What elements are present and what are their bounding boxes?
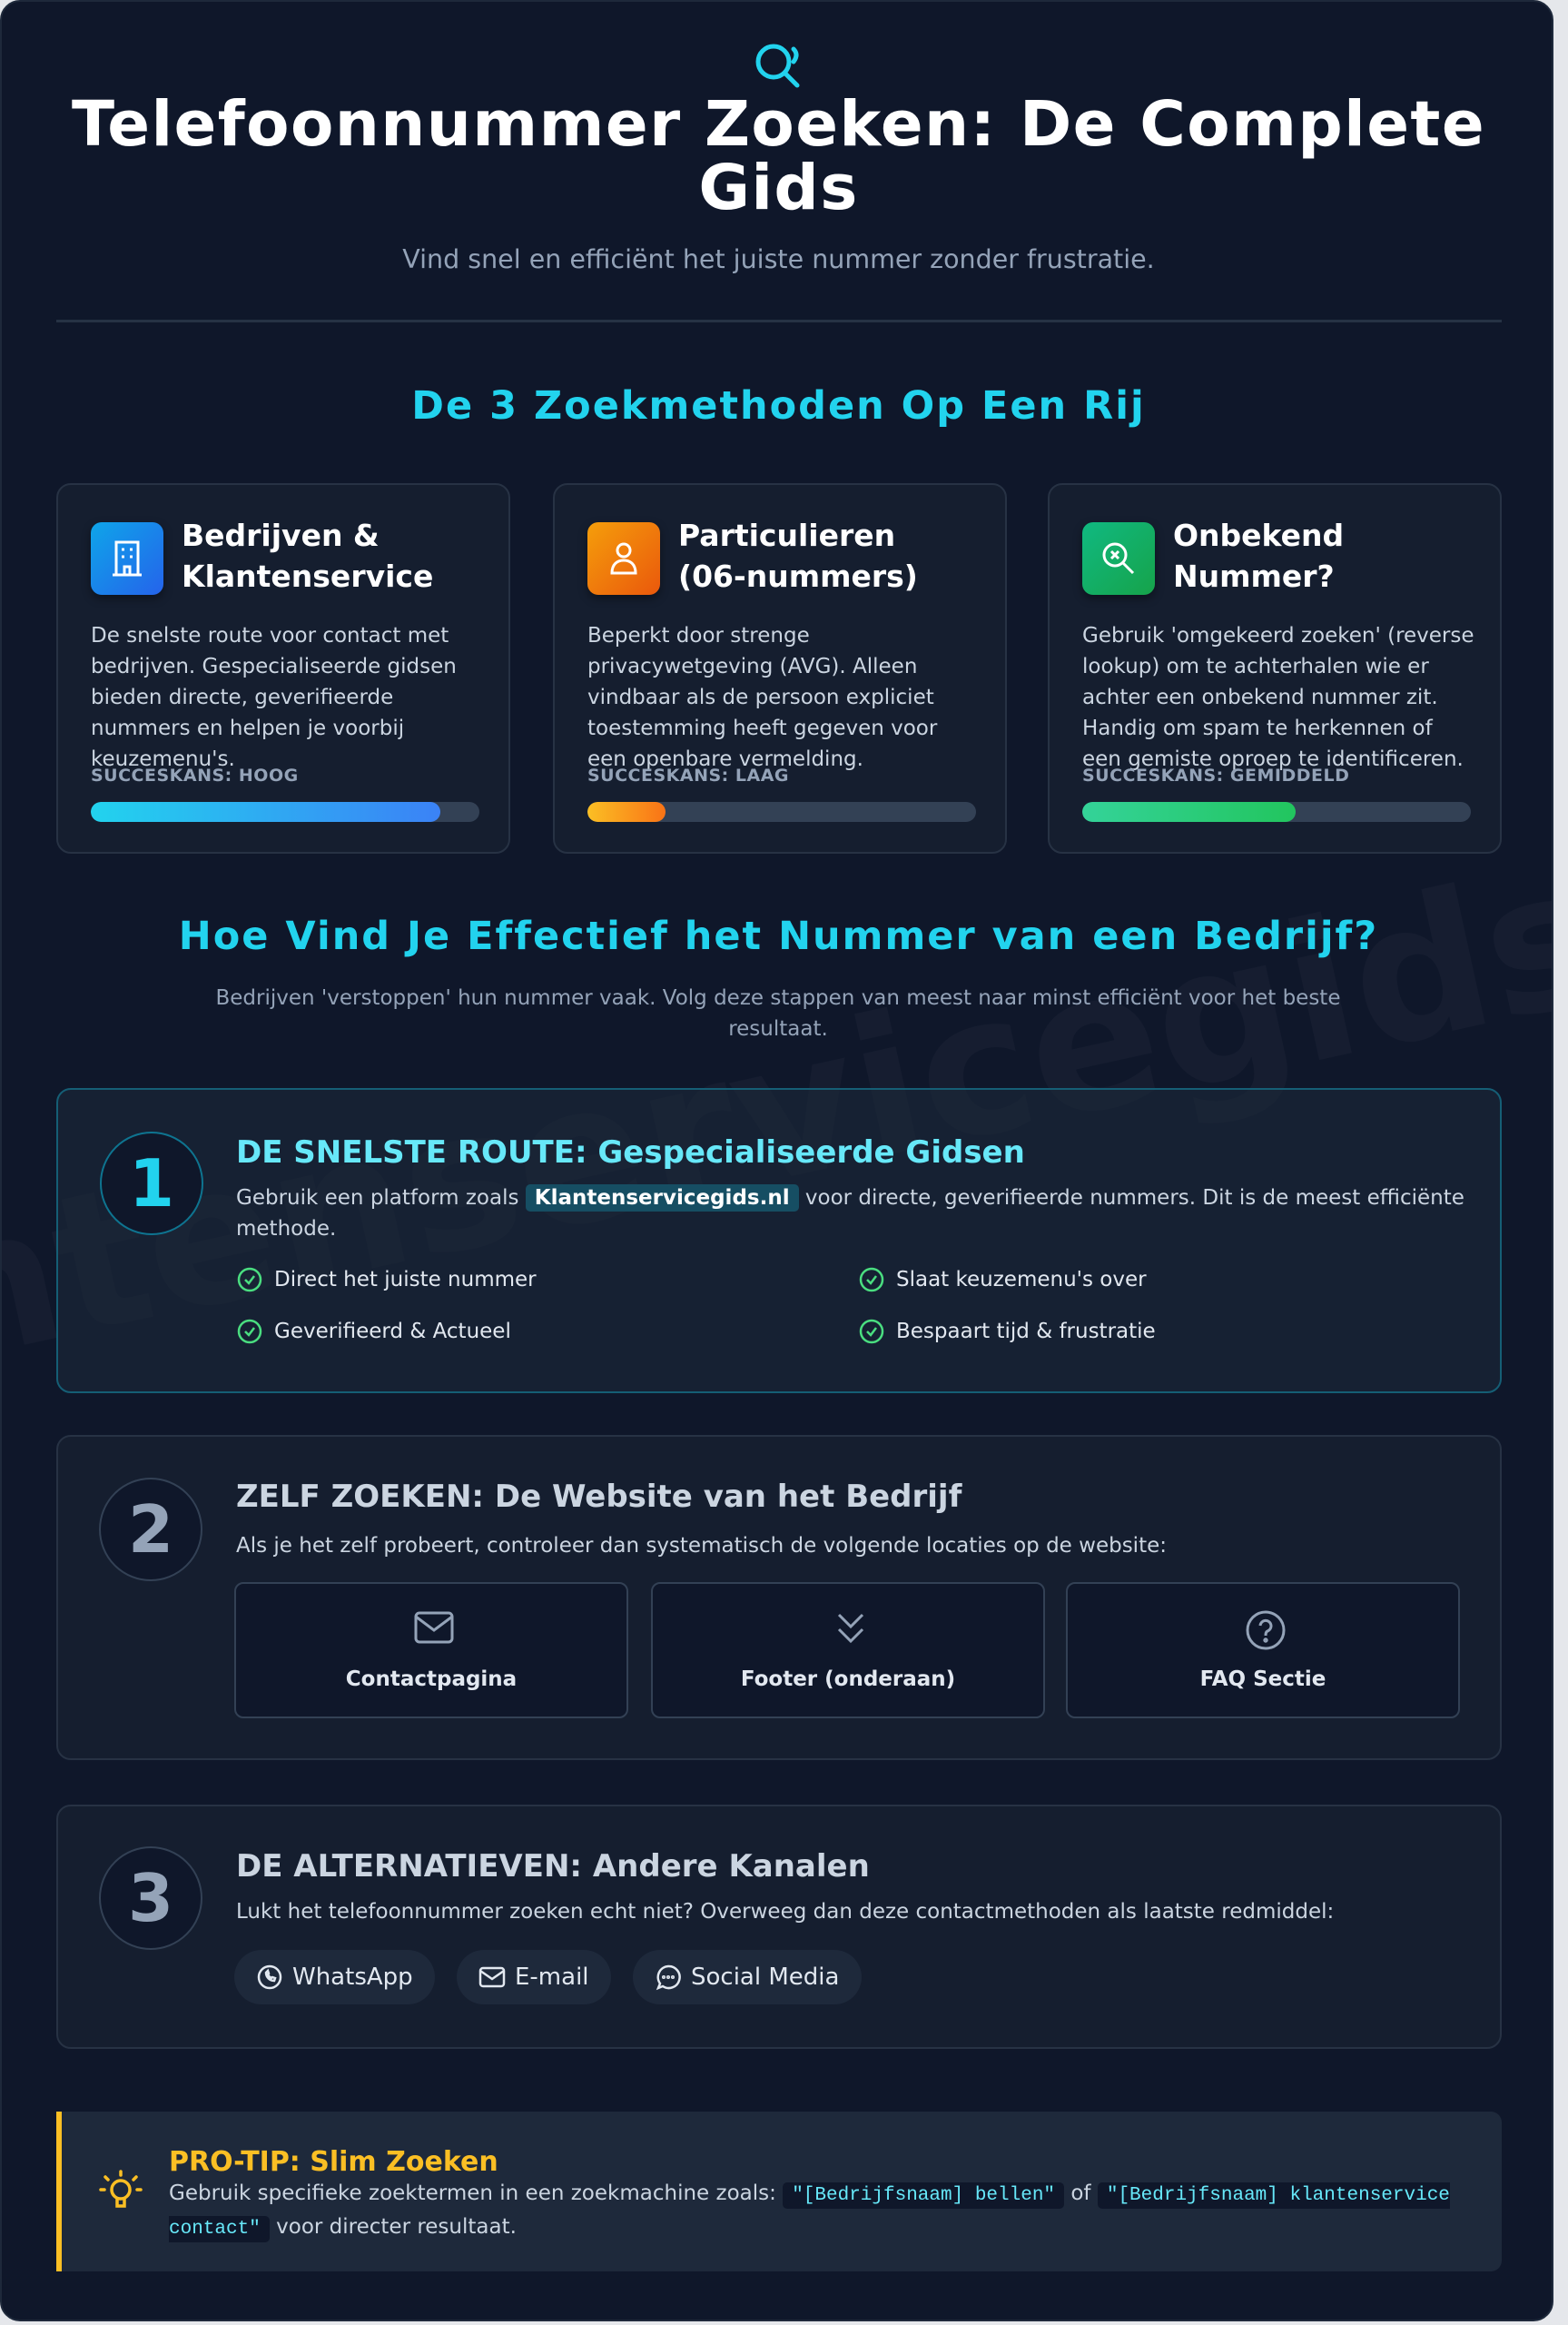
icon: building (91, 522, 163, 595)
box: faq (1066, 1582, 1460, 1718)
panel: onbekend: Gebruik 'omgekeerd zoeken' (reverse lookup) om te achterhalen wie er achter een onbekend nummer zit. Handig om spam te herkennen of een gemiste oproep te identificeren. (1082, 624, 1474, 771)
box: footer: Footer (onderaan) (741, 1667, 955, 1691)
panel: bedrijven: Klantenservice (182, 559, 433, 594)
number 2 (99, 1478, 202, 1581)
panel: particulieren: Particulieren (678, 518, 895, 553)
number 2: 2 (128, 1491, 173, 1568)
box: faq: FAQ Sectie (1200, 1667, 1326, 1691)
panel: step 1: Gebruik een platform zoals Klantenservicegids.nl voor directe, geverifieerde nummers. Dit is de meest efficiënte methode. (236, 1186, 1464, 1241)
number 1 (100, 1132, 203, 1235)
bar: gemiddeld (1082, 802, 1471, 822)
number 3 (99, 1846, 202, 1950)
panel: bedrijven: SUCCESKANS: HOOG (91, 766, 299, 786)
checklist: Direct het juiste nummer (274, 1268, 537, 1291)
pill: email (457, 1950, 611, 2004)
panel: particulieren: (06-nummers) (678, 559, 918, 594)
pill: whatsapp (234, 1950, 435, 2004)
panel: step 1 (56, 1088, 1502, 1393)
icon: search x (1082, 522, 1155, 595)
panel: step 3 (56, 1805, 1502, 2049)
panel: step 2: Als je het zelf probeert, controleer dan systematisch de volgende locaties op de website: (236, 1534, 1167, 1558)
panel: step 2: ZELF ZOEKEN: De Website van het Bedrijf (236, 1479, 962, 1515)
box: contact (234, 1582, 628, 1718)
callout: pro-tip (56, 2112, 1502, 2271)
panel: bedrijven: Bedrijven & (182, 518, 380, 553)
subtitle: Vind snel en efficiënt het juiste nummer zonder frustratie. (402, 244, 1155, 274)
box: footer (651, 1582, 1045, 1718)
title: Gids (698, 152, 859, 224)
checklist: Bespaart tijd & frustratie (896, 1320, 1156, 1343)
panel: step 2 (56, 1435, 1502, 1760)
bar: hoog (91, 802, 479, 822)
checklist (238, 1268, 1156, 1344)
panel: particulieren: Beperkt door strenge privacywetgeving (AVG). Alleen vindbaar als de persoon expliciet toestemming heeft gegeven voor een openbare vermelding. (587, 624, 937, 771)
number 3: 3 (128, 1860, 173, 1936)
panel: onbekend (1048, 483, 1502, 854)
panel: step 3: DE ALTERNATIEVEN: Andere Kanalen (236, 1848, 870, 1885)
number 1: 1 (129, 1145, 174, 1222)
callout: pro-tip: Gebruik specifieke zoektermen in een zoekmachine zoals: "[Bedrijfsnaam] bellen" of "[Bedrijfsnaam] klantenservice contact" voor directer resultaat. (169, 2182, 1450, 2240)
checklist: Geverifieerd & Actueel (274, 1320, 511, 1343)
icon: search phone (755, 44, 799, 87)
box: contact: Contactpagina (346, 1667, 517, 1691)
panel: onbekend: SUCCESKANS: GEMIDDELD (1082, 766, 1349, 786)
pill: whatsapp: WhatsApp (292, 1964, 413, 1991)
panel: onbekend: Nummer? (1173, 559, 1335, 594)
panel: onbekend: Onbekend (1173, 518, 1344, 553)
panel: particulieren: SUCCESKANS: LAAG (587, 766, 789, 786)
checklist: Slaat keuzemenu's over (896, 1268, 1147, 1291)
heading: methods: De 3 Zoekmethoden Op Een Rij (411, 383, 1146, 429)
icon: bulb (99, 2170, 143, 2208)
title: Telefoonnummer Zoeken: De Complete (72, 88, 1485, 161)
heading: bedrijf: Hoe Vind Je Effectief het Nummer van een Bedrijf? (179, 914, 1378, 959)
panel: step 1: DE SNELSTE ROUTE: Gespecialiseerde Gidsen (236, 1134, 1025, 1171)
callout: pro-tip: PRO-TIP: Slim Zoeken (169, 2146, 498, 2178)
panel: particulieren (553, 483, 1007, 854)
panel: bedrijven (56, 483, 510, 854)
intro text: Bedrijven 'verstoppen' hun nummer vaak. Volg deze stappen van meest naar minst efficiënt voor het beste resultaat. (216, 986, 1340, 1041)
panel: bedrijven: De snelste route voor contact met bedrijven. Gespecialiseerde gidsen bieden directe, geverifieerde nummers en helpen je voorbij keuzemenu's. (91, 624, 457, 771)
pill: social: Social Media (691, 1964, 839, 1991)
panel: step 3: Lukt het telefoonnummer zoeken echt niet? Overweeg dan deze contactmethoden als laatste redmiddel: (236, 1900, 1334, 1924)
icon: person (587, 522, 660, 595)
pill: social (633, 1950, 862, 2004)
pill: email: E-mail (515, 1964, 589, 1991)
bar: laag (587, 802, 976, 822)
title (72, 88, 1485, 224)
